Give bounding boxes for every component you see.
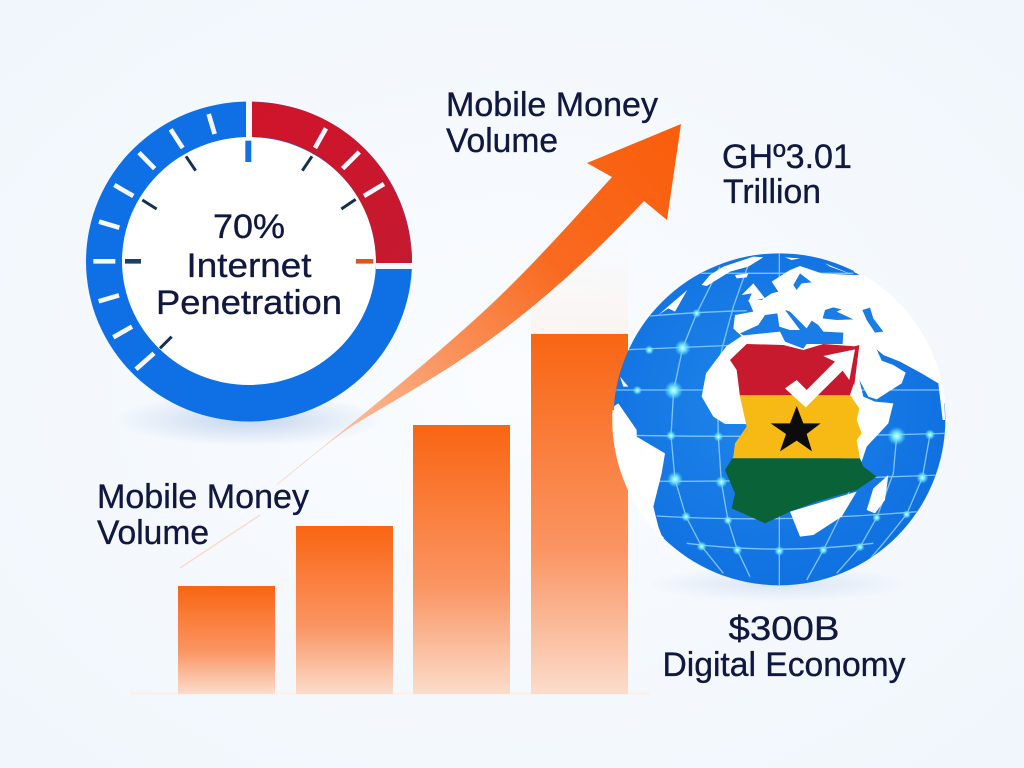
eurasia and africa (702, 266, 945, 462)
label: mobile money volume top (446, 86, 658, 160)
label: GH 3.01 trillion (722, 138, 852, 211)
bar 2 (296, 526, 393, 694)
bar chart (130, 235, 650, 695)
gauge label: 70% (213, 208, 285, 246)
label: mobile money volume top: Mobile Money (446, 86, 658, 124)
madagascar (867, 475, 888, 513)
greenland (702, 257, 763, 286)
globe (600, 253, 967, 587)
label: digital economy: $300B (728, 610, 840, 648)
gauge label: Penetration (156, 284, 342, 322)
south america (614, 403, 665, 536)
gauge red segment (252, 102, 412, 263)
gauge blue ring (86, 102, 412, 422)
inland seas (740, 273, 883, 349)
grid lines (613, 253, 947, 587)
label: mobile money volume left: Volume (97, 514, 209, 552)
north america fragment (658, 290, 687, 315)
gauge shadow (114, 394, 384, 446)
black star (771, 406, 821, 451)
label: GH 3.01 trillion: GHº3.01 (722, 138, 852, 176)
label: digital economy (662, 610, 906, 684)
globe sphere (613, 253, 945, 585)
label: digital economy: Digital Economy (662, 646, 906, 684)
gauge tick marks (93, 114, 384, 369)
globe shadow (649, 566, 909, 602)
Ghana flag map (725, 344, 876, 524)
label: mobile money volume left: Mobile Money (97, 478, 309, 516)
label: GH 3.01 trillion: Trillion (723, 173, 821, 211)
check arrow icon (785, 345, 859, 407)
network nodes (633, 309, 935, 556)
southern africa (790, 492, 857, 537)
bar 1 (178, 586, 275, 694)
gauge label (156, 208, 342, 322)
growth arrow (180, 124, 681, 568)
gauge label: Internet (186, 247, 312, 285)
label: mobile money volume top: Volume (446, 122, 558, 160)
united kingdom (742, 283, 765, 302)
land masses (614, 256, 945, 537)
bar 3 (413, 425, 510, 694)
gauge: internet penetration (86, 100, 414, 422)
label: mobile money volume left (97, 478, 309, 552)
bar 4 (531, 334, 628, 694)
